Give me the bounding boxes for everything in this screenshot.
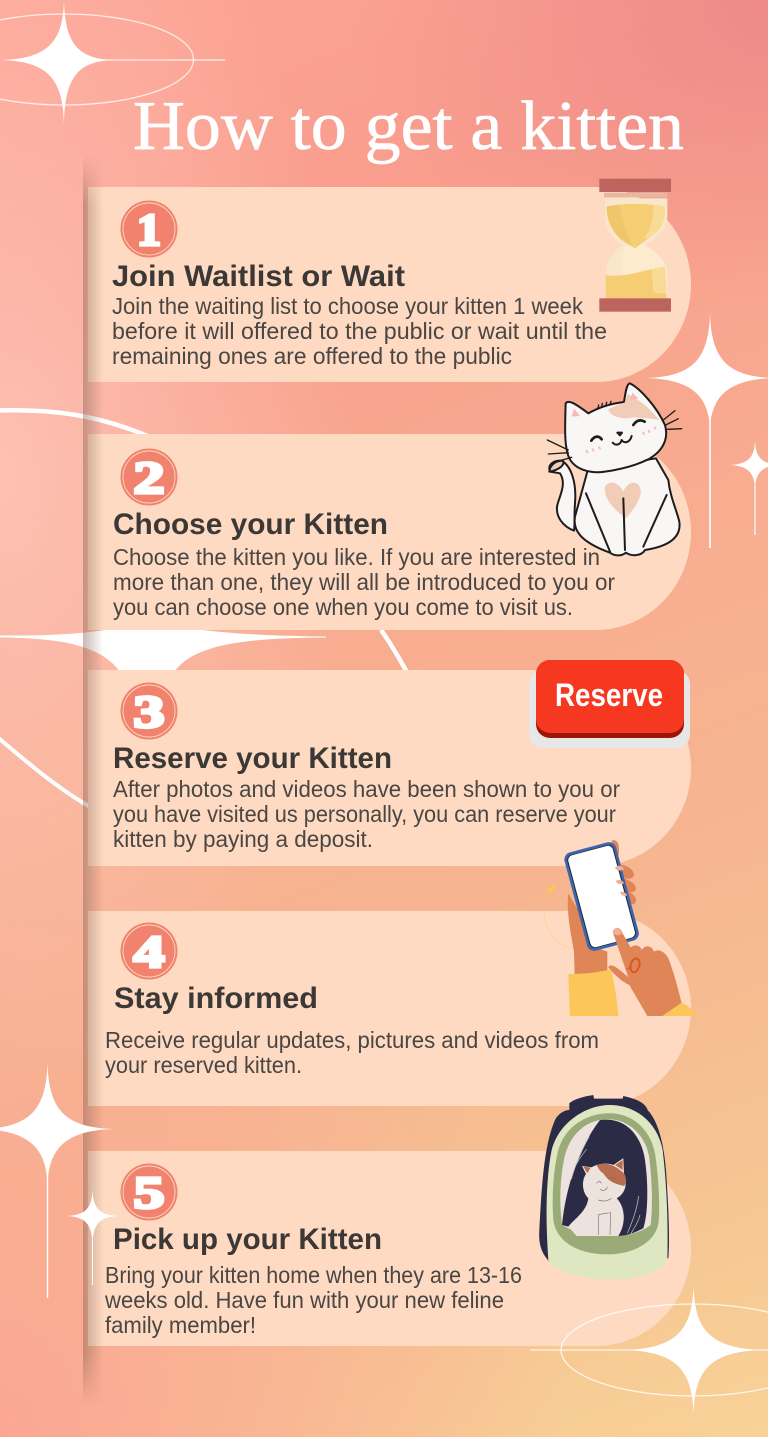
sparkle: bottom right with ring [530,1285,768,1415]
vertical timeline shadow strip [83,162,101,1397]
sparkle: left lower small [65,1189,120,1285]
icon: hands holding phone [543,840,697,1016]
icon: hourglass [599,179,671,312]
step 5 heading: Pick up your Kitten [113,1223,382,1256]
step 4 number badge: 4 [134,927,164,977]
step 2 body text [113,544,615,620]
step 3 body text [113,776,620,852]
step 4 number badge [120,922,178,980]
step 2 heading: Choose your Kitten [113,508,388,541]
step 5 body text: weeks old. Have fun with your new feline [104,1287,504,1313]
icon: reserve button [529,660,690,748]
step 1 number badge: 1 [137,205,161,255]
step 4 body text [105,1027,599,1078]
step 1 heading: Join Waitlist or Wait [112,260,405,293]
sparkle: right large [645,312,768,548]
step 2 number badge [120,448,178,506]
step 3 number badge: 3 [134,687,164,737]
step 1 body text: before it will offered to the public or wait until the [112,318,607,344]
step 1 body text: remaining ones are offered to the public [112,343,512,369]
step 4 heading: Stay informed [114,982,318,1015]
title: How to get a kitten [133,88,684,165]
step 5 body text: family member! [105,1312,256,1338]
step 1 body text: Join the waiting list to choose your kitten 1 week [112,293,583,319]
step 2 number badge: 2 [134,453,164,503]
step 5 body text: Bring your kitten home when they are 13-16 [105,1262,522,1288]
large star and ring behind the cards [0,410,408,808]
step 2 body text: Choose the kitten you like. If you are interested in [113,544,600,570]
step 3 body text: kitten by paying a deposit. [113,826,373,852]
icon: cat in backpack carrier [539,1095,669,1279]
sparkle: left lower large [0,1062,115,1298]
step 3 body text: you have visited us personally, you can reserve your [113,801,616,827]
button label: Reserve [555,677,663,713]
step 5 number badge [120,1164,178,1220]
step 4 body text: your reserved kitten. [105,1052,302,1078]
card 1 background [88,187,691,382]
step 3 heading: Reserve your Kitten [113,742,392,775]
step 2 body text: more than one, they will all be introduced to you or [113,569,615,595]
icon: white cat [547,383,682,555]
step 4 body text: Receive regular updates, pictures and videos from [105,1027,599,1053]
card 3 background [88,670,691,866]
card 2 background [88,434,691,630]
card 4 background [88,911,691,1106]
card 5 background [88,1151,691,1346]
step 3 body text: After photos and videos have been shown to you or [113,776,620,802]
step 1 body text [112,293,607,369]
sparkle: top left with ring [0,0,225,124]
sparkle: right small [728,440,768,535]
step 5 body text [104,1262,522,1338]
step 3 number badge [120,682,178,740]
step 5 number badge: 5 [134,1168,164,1218]
step 2 body text: you can choose one when you come to visit us. [113,594,573,620]
step 1 number badge [120,200,178,258]
